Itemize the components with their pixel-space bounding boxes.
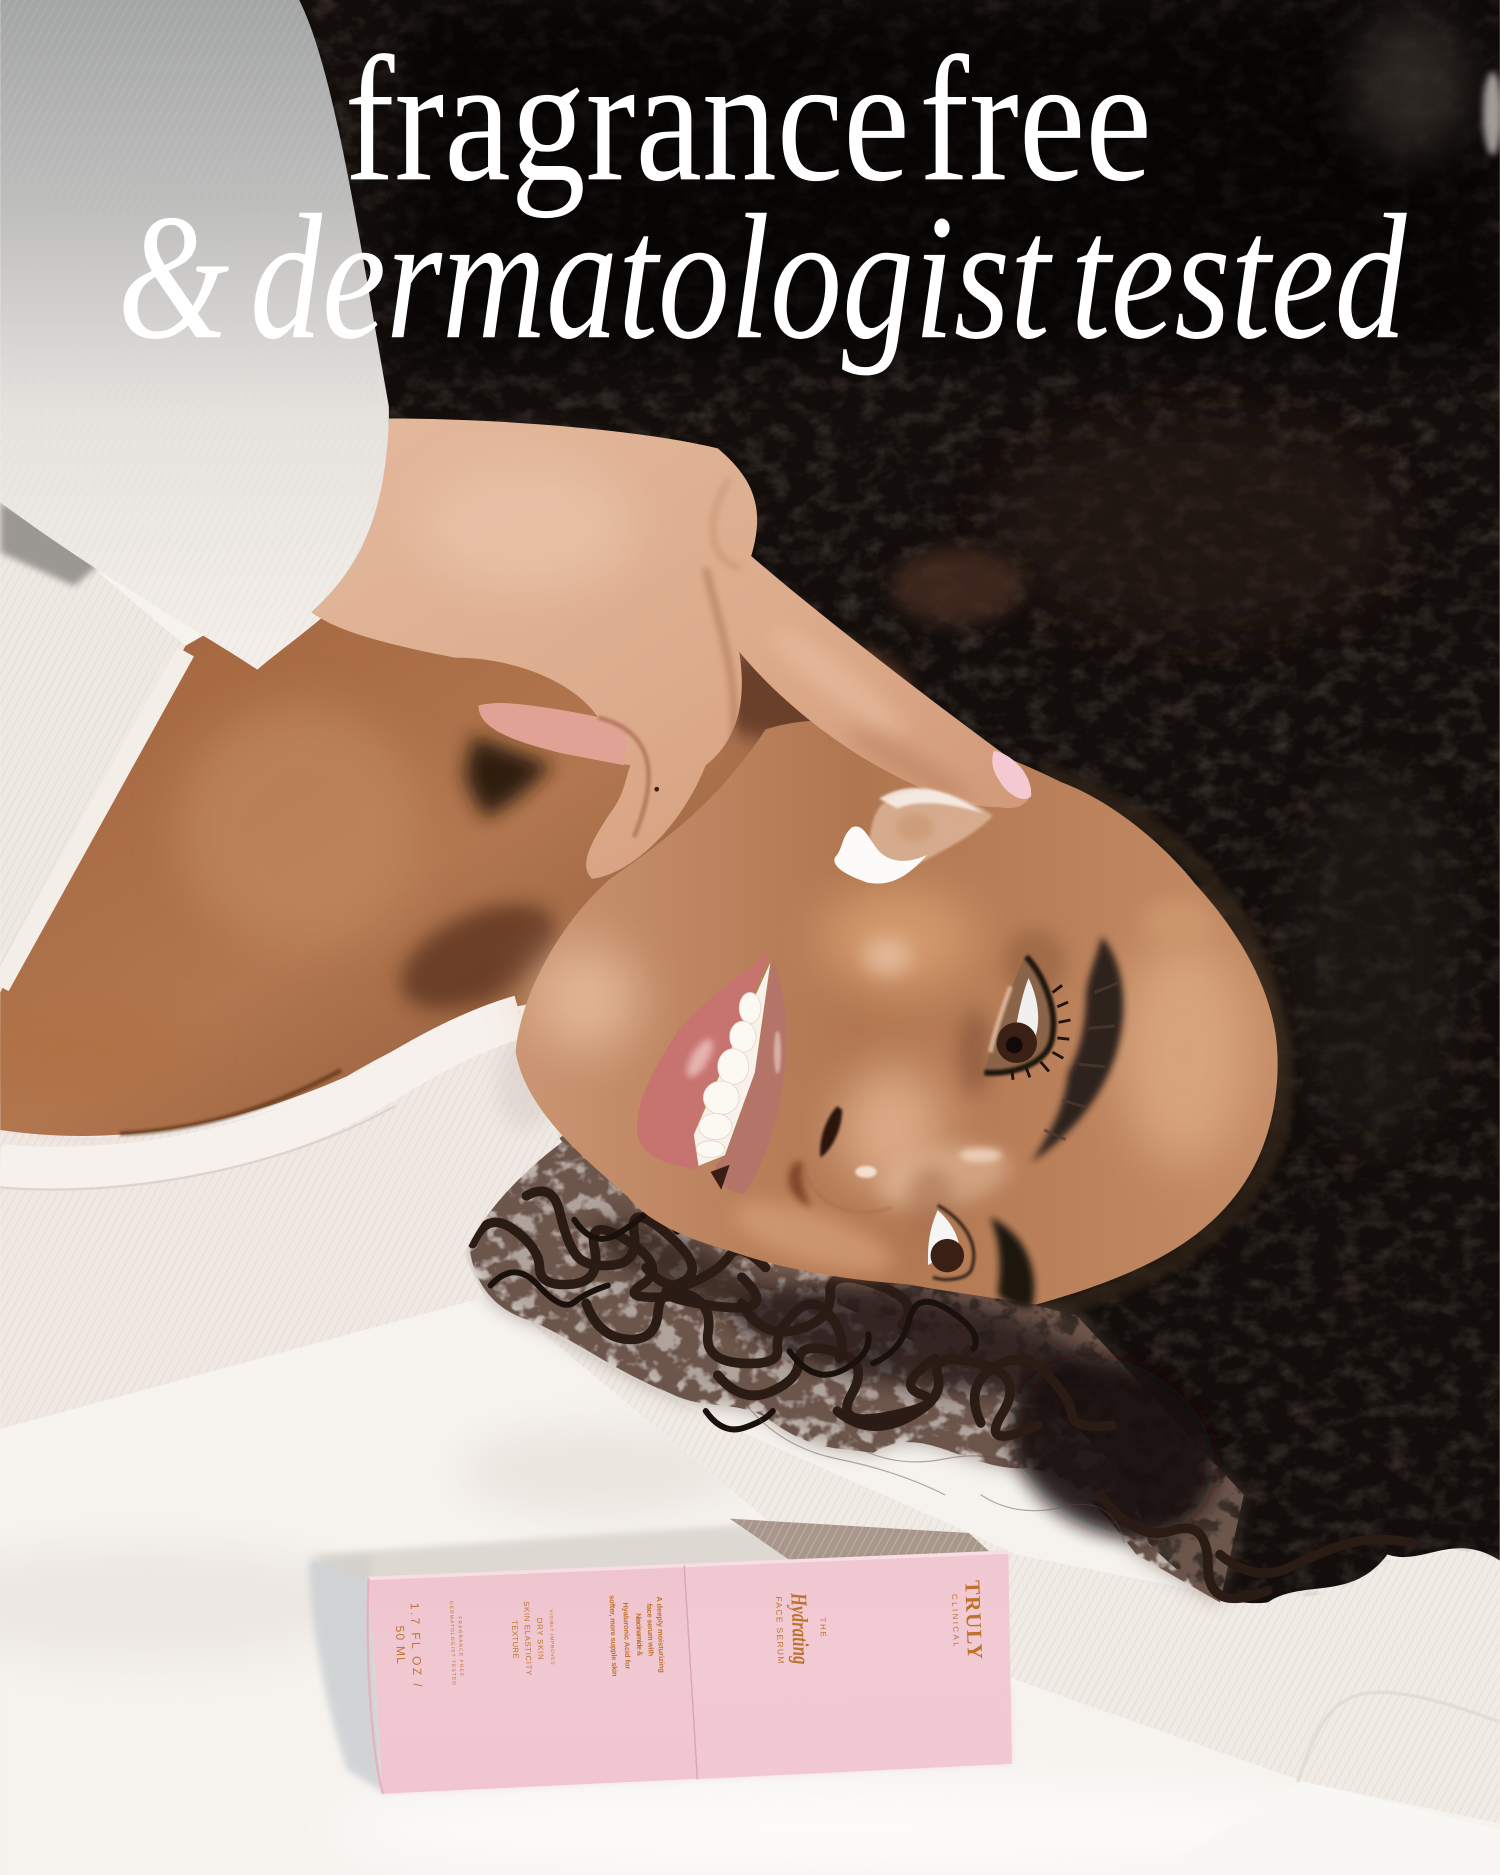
benefits list [510, 1601, 555, 1676]
hand with pointing finger [311, 419, 1031, 879]
benefits list: TEXTURE [510, 1620, 520, 1659]
fragrance claim: DERMATOLOGIST TESTED [448, 1601, 457, 1685]
hairline soft wisps around the forehead [1041, 771, 1284, 1312]
product description: Niacinamide & [634, 1613, 645, 1657]
benefits list: VISIBLY IMPROVES [547, 1609, 555, 1665]
volume: 1.7 FL OZ / [408, 1603, 425, 1687]
product description [608, 1595, 667, 1677]
headline [117, 19, 1408, 376]
product description: Hyaluronic Acid for [621, 1602, 633, 1670]
product name script: Hydrating [786, 1592, 814, 1665]
benefits list: DRY SKIN [535, 1618, 545, 1660]
brand name: TRULY [960, 1580, 987, 1660]
shirt collar [0, 652, 520, 1190]
shirt torso [0, 1010, 562, 1429]
benefits list: SKIN ELASTICITY [522, 1601, 533, 1676]
upper eyebrow [1031, 936, 1123, 1162]
product description: face serum with [645, 1603, 656, 1657]
loose curls over shirt [455, 1112, 1411, 1614]
product description: A deeply moisturizing [655, 1596, 667, 1674]
hair mass [287, 0, 1500, 1603]
product shadows [309, 1519, 993, 1794]
product description: softer, more supple skin [608, 1595, 619, 1677]
product name: THE [818, 1617, 828, 1637]
product box: The Hydrating Face Serum [368, 1552, 1012, 1794]
pink fingernail [992, 751, 1031, 799]
smiling mouth [637, 952, 787, 1193]
fragrance claim [448, 1601, 464, 1685]
serum cream on cheek [834, 788, 993, 884]
volume: 50 ML [393, 1625, 408, 1664]
brand sub-label: CLINICAL [950, 1594, 961, 1647]
sleeve cuff [0, 0, 389, 670]
chest and neck skin [0, 574, 909, 1136]
face [516, 720, 1278, 1305]
volume [393, 1603, 425, 1687]
upper eye [984, 957, 1070, 1080]
headline line one: fragrance free [345, 19, 1152, 218]
lower eye [928, 1205, 974, 1279]
product type: FACE SERUM [774, 1596, 786, 1664]
fragrance claim: FRAGRANCE FREE [456, 1616, 464, 1676]
nose shadow and nostril [788, 1106, 891, 1212]
shirt sleeve on the right [514, 1309, 1500, 1824]
lower eyebrow [990, 1217, 1034, 1308]
shirt shoulder strap [0, 490, 186, 993]
